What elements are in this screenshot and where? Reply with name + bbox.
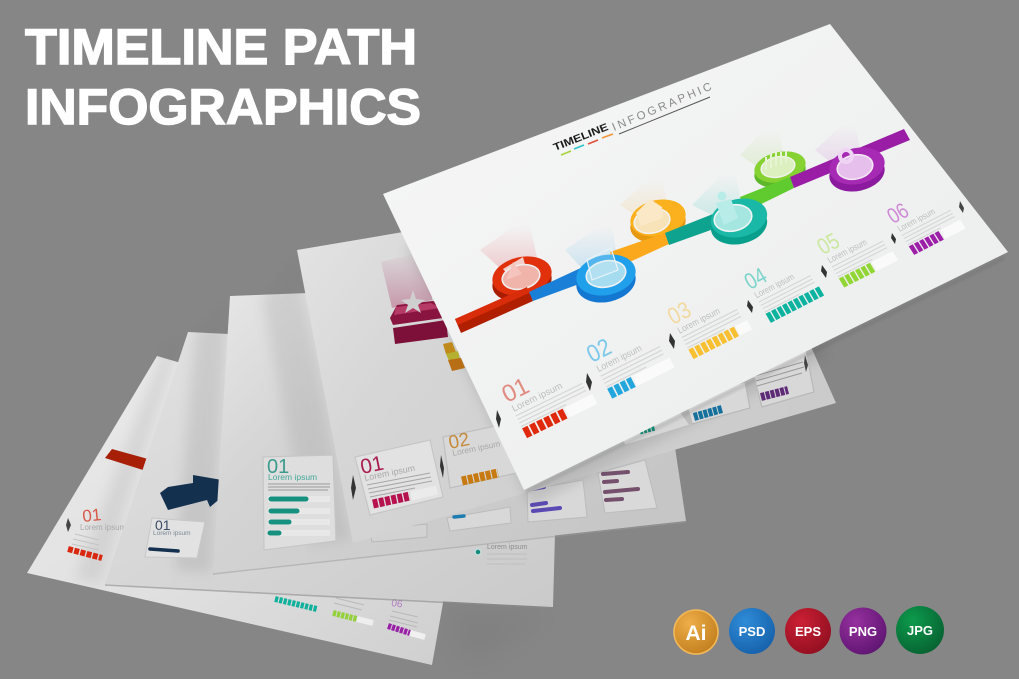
- card 01: [498, 349, 595, 434]
- card 03: [663, 276, 749, 355]
- card 02 orange: [443, 425, 530, 488]
- icon: star: [401, 290, 425, 313]
- card purple: [527, 480, 587, 522]
- legend dot: [475, 549, 481, 555]
- shadow under sheet 4: [105, 585, 553, 608]
- card mauve: [598, 460, 657, 513]
- crimson block lower: [393, 320, 448, 344]
- shadow from sheet 3: [175, 300, 228, 573]
- ring: purple: [826, 143, 888, 196]
- text lines: [832, 241, 889, 277]
- title: INFOGRAPHICS: [25, 79, 421, 135]
- text lines: [601, 347, 665, 387]
- icon: bars: [766, 151, 786, 170]
- card 01 number: 01: [81, 505, 102, 526]
- heading: timeline infographic: TIMELINE: [552, 121, 610, 154]
- end divider: [959, 201, 964, 213]
- shadow of main sheet: [526, 258, 1004, 492]
- panel: sheet 5 red timeline: [27, 335, 445, 665]
- teal progress bar: [275, 599, 317, 609]
- heading: Lorem ipsum: [268, 472, 317, 482]
- heading: Lorem ipsum: [826, 237, 869, 265]
- icon: JPG badge: JPG: [907, 623, 933, 638]
- blue bar: [454, 516, 464, 517]
- glass: [584, 257, 628, 291]
- card 04: [740, 244, 823, 319]
- text lines: [516, 383, 588, 427]
- card 05 and 06 text lines: [334, 598, 418, 627]
- progress bar: [911, 235, 942, 251]
- bar tail: [411, 490, 437, 496]
- card divider: [351, 475, 356, 500]
- red path block: [105, 449, 148, 471]
- progress bar: [768, 290, 823, 318]
- icon: PSD badge: PSD: [739, 624, 765, 639]
- text lines: [367, 473, 432, 497]
- icon: Ai badge: Ai: [686, 622, 706, 645]
- icon: Ai badge: [674, 610, 718, 654]
- icon: EPS badge: [785, 608, 831, 654]
- teal bar: [665, 212, 722, 245]
- card 06 number: 06: [391, 598, 404, 611]
- title: TIMELINE PATH: [25, 19, 417, 75]
- progress bar: [462, 473, 498, 481]
- card 05: [813, 210, 895, 284]
- number: 01: [267, 456, 289, 478]
- bar tail: [567, 399, 595, 413]
- purple progress bar: [388, 626, 410, 633]
- shadow from sheet 2: [262, 255, 350, 545]
- progress bar: [373, 496, 410, 504]
- purple bars: [532, 487, 560, 511]
- progress bar: [691, 331, 737, 354]
- navy arrow block: [160, 475, 222, 510]
- panel: sheet 2 crimson timeline: [297, 106, 836, 543]
- heading: Lorem ipsum: [752, 271, 796, 300]
- icon: PSD badge: [729, 608, 775, 654]
- heading: Lorem ipsum: [510, 381, 565, 415]
- purple bar: [761, 390, 788, 397]
- glass: [835, 152, 875, 182]
- green progress bar: [333, 613, 357, 619]
- glass: [500, 261, 542, 293]
- card 02: [582, 311, 672, 394]
- ground shadow: [445, 612, 550, 664]
- card 01 text lines: [72, 534, 99, 550]
- card 04: 04: [740, 263, 772, 295]
- text lines: [268, 484, 330, 490]
- card 03: 03: [663, 296, 696, 330]
- card purple segments: [750, 345, 814, 407]
- purple bar: [790, 129, 910, 188]
- light beam green: [740, 128, 785, 170]
- progress bar: [525, 413, 566, 433]
- card 06: [883, 181, 963, 251]
- card 02: 02: [582, 333, 616, 368]
- ring: blue: [572, 248, 640, 308]
- card 06 divider: [891, 233, 896, 244]
- heading: Lorem ipsum: [153, 530, 191, 537]
- crimson block upper: [390, 301, 445, 325]
- blue bar: [529, 266, 590, 301]
- crimson block top: [394, 303, 440, 315]
- icon: phone outline: [587, 248, 618, 280]
- light beam red: [480, 226, 538, 270]
- card 06: 06: [883, 199, 914, 229]
- card 01 heading: Lorem ipsum: [80, 523, 127, 532]
- bar tail: [874, 256, 895, 267]
- icon: EPS badge: EPS: [795, 624, 821, 639]
- card divider 3: [804, 355, 808, 372]
- heading: Lorem ipsum: [676, 305, 722, 336]
- heading: Lorem ipsum: [363, 463, 416, 483]
- light beam purple: [815, 125, 862, 168]
- teal segments: [640, 428, 655, 432]
- green bar tail: [357, 619, 373, 623]
- icon: JPG badge: [896, 606, 944, 654]
- icon: PNG badge: PNG: [849, 624, 877, 639]
- legend text lines: [487, 554, 527, 564]
- card teal 01: [263, 455, 336, 550]
- legend heading: Lorem ipsum: [487, 544, 528, 551]
- card teal partial: [618, 412, 690, 445]
- card blue: [447, 507, 511, 531]
- glass: [712, 201, 754, 235]
- text lines: [902, 210, 957, 245]
- heading: timeline infographic: [552, 81, 714, 155]
- panel: sheet 3 bar cards: [213, 255, 686, 573]
- icon: PNG badge: [840, 608, 886, 654]
- underline: [619, 97, 710, 134]
- shadow under sheet 3: [213, 522, 686, 574]
- glass: [632, 206, 672, 236]
- card 05 divider: [821, 265, 827, 278]
- title: [25, 19, 421, 135]
- orange bar: [610, 233, 669, 270]
- card 01: [145, 517, 205, 558]
- card 01: 01: [498, 373, 534, 408]
- icon: gear: [840, 150, 852, 162]
- text lines: [759, 276, 816, 312]
- orange and yellow bricks: [443, 342, 465, 371]
- icon: envelope: [636, 199, 663, 226]
- bar tail: [634, 362, 672, 381]
- text lines: [682, 309, 743, 348]
- card 03 divider: [669, 333, 675, 349]
- purple bar tail: [410, 633, 425, 637]
- ring: orange: [627, 195, 689, 247]
- light beam blue: [565, 226, 618, 272]
- light beam: [381, 250, 432, 308]
- bar tracks: [268, 499, 330, 533]
- card divider: [66, 518, 71, 532]
- icon: person: [716, 192, 738, 225]
- blue bar: [694, 409, 722, 417]
- card 04 divider: [747, 300, 753, 313]
- shadow of main sheet: [406, 106, 826, 506]
- green bar: [740, 177, 794, 212]
- colored dashes: [561, 134, 613, 155]
- ring gap: [503, 257, 527, 280]
- card 02 divider: [586, 373, 592, 391]
- light beam teal: [692, 175, 742, 218]
- progress bar: [150, 549, 178, 551]
- progress bar: [610, 381, 634, 394]
- text lines: [755, 362, 804, 386]
- mauve bars: [603, 472, 638, 500]
- light beam orange: [620, 178, 668, 220]
- heading: Lorem ipsum: [451, 438, 501, 458]
- panel: sheet 4 navy timeline: [105, 300, 560, 607]
- timeline path bars: [455, 129, 910, 333]
- card blue segments: [685, 382, 750, 424]
- ring: teal: [707, 192, 771, 250]
- card 05: 05: [813, 229, 844, 260]
- heading light word: INFOGRAPHIC: [610, 81, 714, 134]
- red bar: [455, 289, 533, 333]
- icon: pointer: [506, 262, 522, 280]
- glass: [759, 154, 797, 180]
- card 01 progress bar: [68, 549, 102, 558]
- ring: red: [489, 251, 555, 307]
- card 01 crimson: [355, 440, 443, 515]
- progress bar: [842, 267, 874, 283]
- panel: main timeline sheet: [383, 24, 1008, 490]
- heading: Lorem ipsum: [896, 207, 937, 234]
- heading: Lorem ipsum: [595, 343, 643, 374]
- number: 01: [358, 452, 386, 479]
- shadow from sheet 4: [75, 335, 183, 584]
- card 01 divider: [496, 410, 501, 428]
- number: 02: [447, 428, 471, 453]
- bar tail: [942, 224, 963, 235]
- ring: green: [751, 147, 809, 192]
- card divider 2: [440, 455, 444, 478]
- bars: [270, 499, 306, 533]
- number: 01: [155, 517, 171, 533]
- card lower 1: [370, 524, 427, 542]
- bar tail: [737, 325, 749, 331]
